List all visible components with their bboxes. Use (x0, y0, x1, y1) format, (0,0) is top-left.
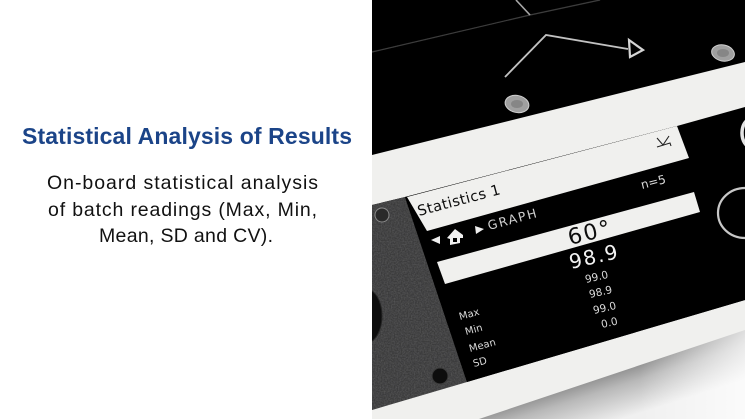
white device frame (372, 300, 745, 419)
body text: Mean, SD and CV). (99, 225, 273, 247)
screen header band (407, 126, 689, 231)
panel screw top (375, 208, 389, 222)
button ring top (742, 119, 745, 147)
white bezel strip (372, 62, 745, 205)
icon: arrow logo (505, 35, 643, 77)
side grey panel (372, 197, 467, 410)
statistics values: 99.0 (584, 269, 609, 286)
top panel seam (372, 0, 600, 52)
screw right (711, 44, 735, 62)
panel: text side (0, 0, 372, 419)
statistics values: 0.0 (600, 315, 619, 331)
statistics labels: Mean (468, 337, 497, 355)
shadow below device (479, 322, 745, 419)
sample count: n=5 (639, 172, 667, 192)
screen (405, 126, 745, 382)
body text: On-board statistical analysis (47, 172, 318, 194)
header title: Statistics 1 (416, 182, 502, 220)
statistics labels: Min (464, 323, 484, 338)
angle reading: 60° (565, 216, 613, 251)
navigation row (431, 205, 538, 245)
statistics values: 99.0 (592, 300, 617, 317)
icon: right arrow (475, 226, 484, 234)
icon: export (657, 136, 671, 147)
panel knob (372, 290, 382, 342)
statistics labels: Max (458, 307, 481, 323)
icon: home (447, 229, 463, 245)
graph label: GRAPH (486, 205, 538, 233)
statistics labels (459, 309, 496, 366)
device background (372, 0, 745, 419)
panel: instrument photo (350, 0, 745, 419)
button ring bottom (718, 188, 745, 238)
body text (47, 172, 318, 247)
statistics values (585, 270, 617, 328)
statistics values: 98.9 (588, 284, 613, 301)
main reading: 98.9 (567, 239, 620, 274)
icon: left arrow (431, 236, 440, 244)
heading: Statistical Analysis of Results (22, 123, 352, 149)
body text: of batch readings (Max, Min, (48, 199, 317, 221)
top seam tick (516, 0, 530, 15)
statistics labels: SD (472, 356, 489, 370)
selected row band (437, 192, 700, 284)
panel screw bottom (432, 368, 448, 384)
screw left (504, 94, 530, 114)
